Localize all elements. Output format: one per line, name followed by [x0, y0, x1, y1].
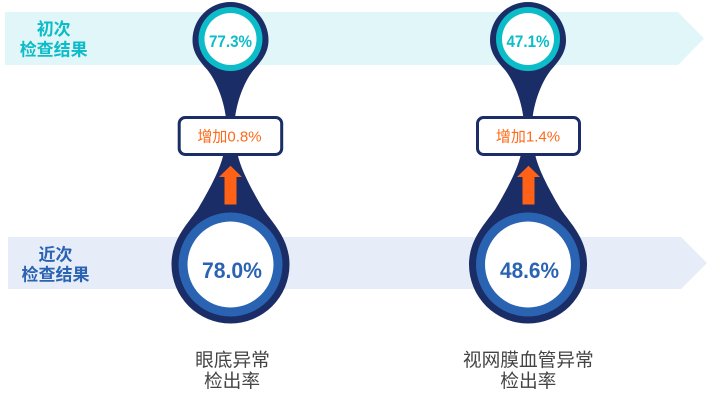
upper pin body — [192, 2, 268, 118]
increase box — [179, 118, 282, 154]
pin group: fundus abnormality — [172, 2, 290, 324]
caption: retinal vascular abnormality detection rate — [463, 350, 594, 392]
caption: fundus abnormality detection rate — [195, 350, 270, 392]
lower ring — [178, 212, 282, 316]
increase box — [478, 118, 580, 154]
label: latest examination — [22, 246, 90, 284]
value: 48.6%: 48.6% — [500, 258, 559, 283]
lower drop body — [172, 154, 290, 324]
label: first examination: 初次 — [37, 19, 71, 39]
upper pin body — [490, 2, 566, 118]
arrow: up — [219, 166, 242, 204]
caption: fundus abnormality detection rate: 眼底异常 — [195, 350, 270, 370]
pin group: retinal vascular abnormality — [469, 2, 587, 324]
increase text: 增加0.8% — [197, 128, 262, 146]
value: 47.1%: 47.1% — [506, 33, 550, 51]
band: first examination — [5, 12, 704, 65]
upper ring — [496, 7, 560, 71]
caption: retinal vascular abnormality detection rate: 检出率 — [500, 370, 556, 392]
value: 78.0%: 78.0% — [202, 258, 262, 283]
caption: fundus abnormality detection rate: 检出率 — [204, 370, 260, 392]
increase text: 增加1.4% — [496, 128, 560, 146]
label: latest examination: 检查结果 — [22, 264, 90, 284]
lower drop body — [469, 154, 587, 324]
arrow: up — [517, 166, 540, 204]
lower ring — [476, 212, 580, 316]
upper ring — [198, 7, 262, 71]
label: latest examination: 近次 — [38, 246, 72, 264]
label: first examination: 检查结果 — [20, 40, 88, 60]
caption: retinal vascular abnormality detection rate: 视网膜血管异常 — [463, 350, 594, 370]
band: latest examination — [8, 237, 707, 289]
label: first examination — [20, 19, 88, 60]
value: 77.3%: 77.3% — [209, 33, 252, 51]
